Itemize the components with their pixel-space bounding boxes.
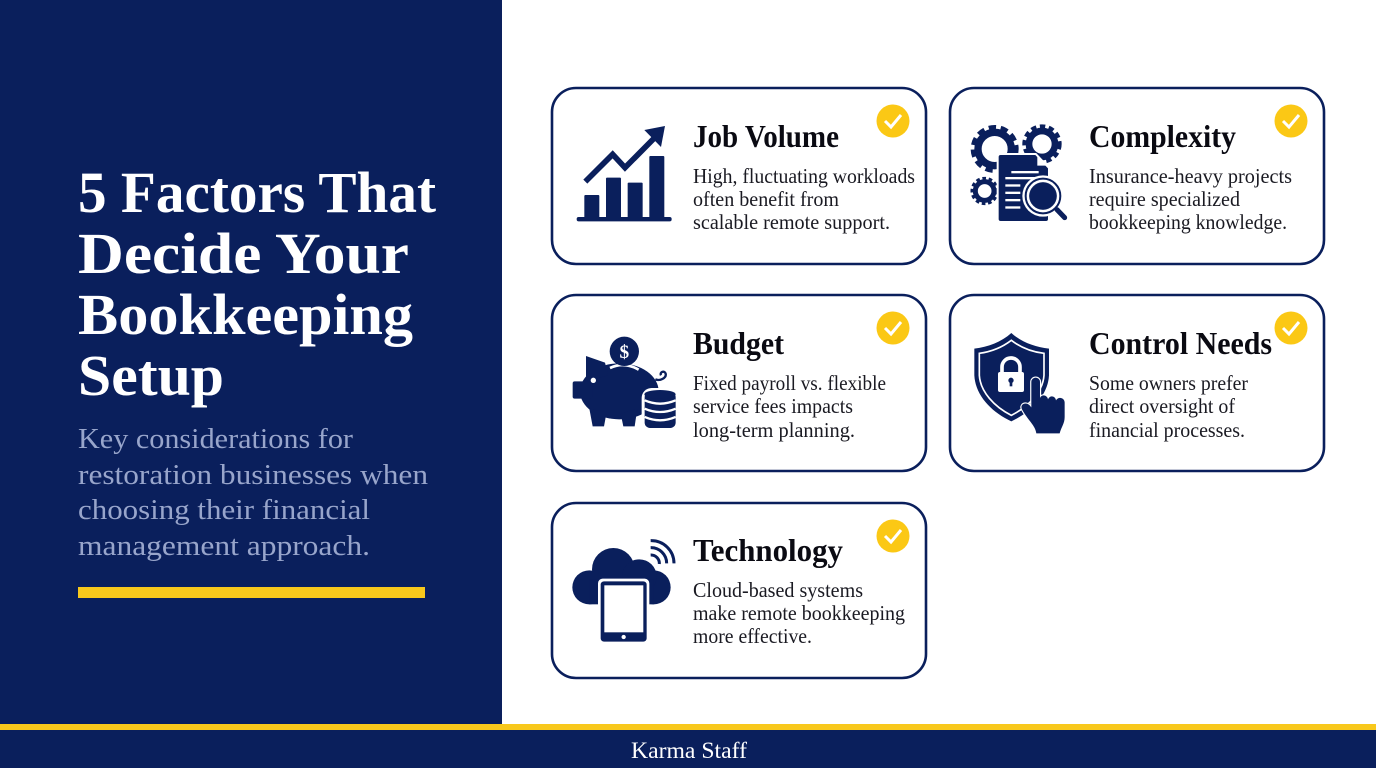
card: Budget [552, 295, 926, 471]
footer text: Karma Staff [631, 738, 747, 763]
title: 5 Factors That [78, 160, 437, 225]
subtitle: management approach. [78, 530, 370, 562]
title: Bookkeeping [78, 282, 413, 347]
text: Job Volume description: often benefit from [693, 187, 839, 211]
text: Control Needs description: direct oversight of [1089, 394, 1235, 418]
card: Job Volume [552, 88, 926, 264]
title: Setup [78, 343, 224, 408]
icon: check badge [876, 104, 910, 138]
title [78, 160, 437, 408]
text: Technology description: more effective. [693, 624, 812, 648]
text: Technology description [693, 578, 905, 648]
text: Complexity description: bookkeeping knowledge. [1089, 210, 1287, 234]
heading: Complexity: Complexity [1089, 118, 1236, 154]
text: Job Volume description: High, fluctuating workloads [693, 164, 915, 188]
text: Budget description: Fixed payroll vs. flexible [693, 371, 886, 395]
heading: Budget: Budget [693, 325, 784, 361]
title: Decide Your [78, 221, 409, 286]
text: Job Volume description [693, 164, 915, 234]
subtitle: choosing their financial [78, 494, 370, 526]
text: Job Volume description: scalable remote support. [693, 210, 890, 234]
icon: check badge [876, 312, 910, 344]
heading: Job Volume: Job Volume [693, 118, 839, 154]
card: Complexity [950, 88, 1324, 264]
text: Budget description [693, 371, 886, 442]
text: Control Needs description [1089, 371, 1248, 442]
footer bar [0, 724, 1376, 768]
heading: Technology: Technology [693, 532, 843, 568]
icon: piggy bank with coins [573, 337, 678, 431]
icon: cloud, tablet and wifi [572, 541, 674, 644]
subtitle [78, 423, 429, 562]
yellow accent bar [78, 587, 425, 598]
text: Complexity description: require specialized [1089, 187, 1240, 211]
subtitle: restoration businesses when [78, 459, 429, 491]
text: Complexity description: Insurance-heavy projects [1089, 164, 1292, 188]
panel: left navy sidebar [0, 0, 502, 724]
icon: check badge [1274, 312, 1308, 344]
card: Control Needs [950, 295, 1324, 471]
icon: growth chart [577, 126, 672, 221]
text: Technology description: make remote bookkeeping [693, 601, 905, 625]
icon: piggy bank with coins: $ [619, 342, 629, 363]
icon: gears and document with magnifier [972, 126, 1065, 221]
card: Technology [552, 503, 926, 678]
icon: check badge [1274, 104, 1308, 138]
icon: shield with lock and pointing hand [974, 333, 1065, 433]
text: Budget description: service fees impacts [693, 394, 853, 418]
subtitle: Key considerations for [78, 423, 353, 455]
text: Technology description: Cloud-based systems [693, 578, 863, 602]
text: Control Needs description: Some owners prefer [1089, 371, 1248, 395]
text: Budget description: long-term planning. [693, 418, 855, 442]
icon: check badge [876, 520, 910, 552]
text: Control Needs description: financial processes. [1089, 418, 1245, 442]
heading: Control Needs: Control Needs [1089, 325, 1272, 361]
text: Complexity description [1089, 164, 1292, 234]
